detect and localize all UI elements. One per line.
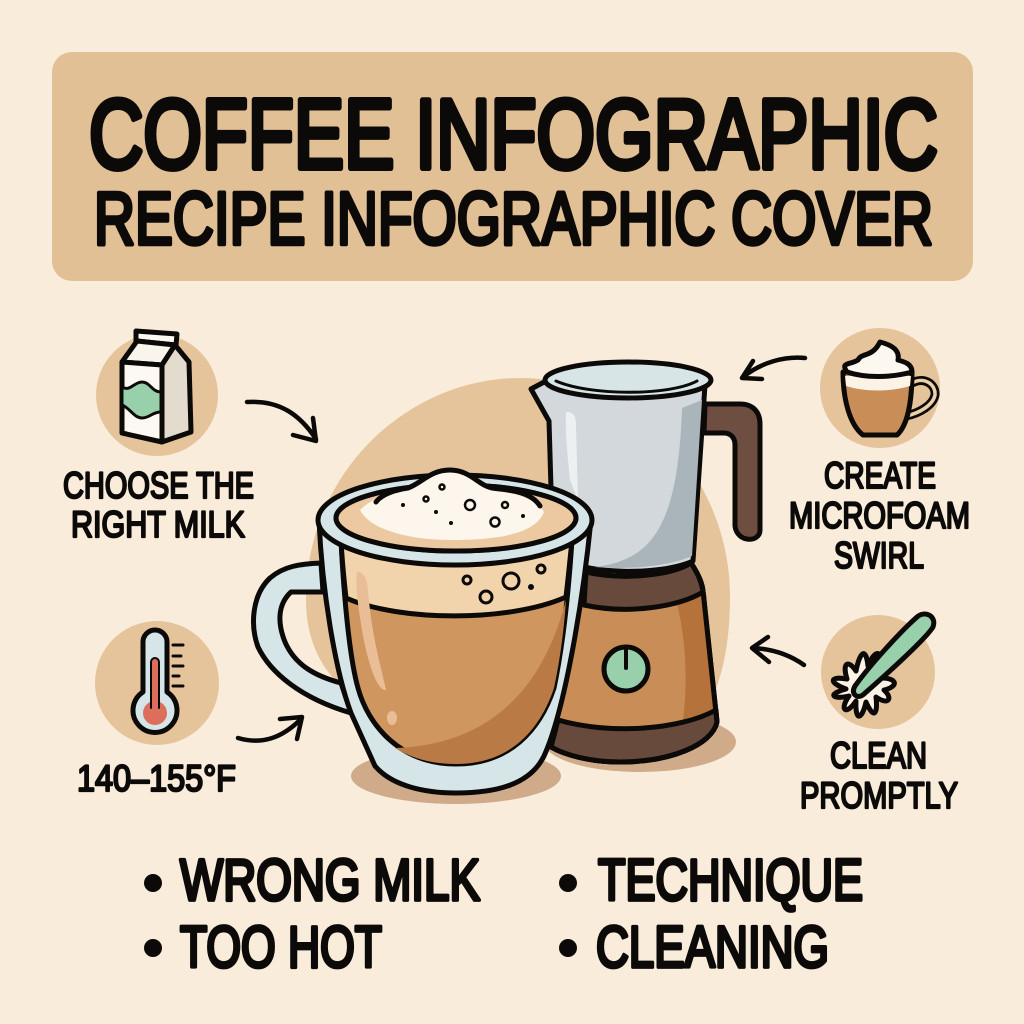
foam layer (341, 540, 572, 616)
bullet: wrong milk: WRONG MILK (180, 848, 480, 913)
label: create microfoam swirl: SWIRL (834, 534, 924, 576)
label: create microfoam swirl: MICROFOAM (789, 494, 970, 536)
highlights (356, 572, 386, 690)
carton label (122, 382, 161, 418)
bullet list (144, 848, 863, 980)
arrow: milk to mug (247, 402, 316, 441)
bullet: cleaning (559, 915, 829, 980)
arrow: microfoam to jug (742, 358, 805, 379)
bubbles (463, 565, 545, 603)
icon: cappuccino cup (820, 328, 940, 448)
label: create microfoam swirl: CREATE (824, 454, 936, 496)
bullet: technique: TECHNIQUE (598, 848, 863, 913)
bullet: too hot (144, 915, 382, 980)
frother base (551, 563, 717, 762)
arrow: clean to base (752, 637, 804, 665)
coffee liquid (341, 540, 572, 764)
mug handle (254, 563, 351, 713)
label: choose the right milk: RIGHT MILK (71, 503, 245, 545)
icon: milk carton (96, 331, 218, 456)
frother handle (704, 404, 760, 539)
label: temperature: 140–155°F (77, 757, 236, 799)
label: clean promptly: CLEAN (830, 734, 927, 776)
label: create microfoam swirl (789, 454, 970, 576)
arrow: temperature to mug (238, 717, 302, 741)
label: clean promptly (800, 734, 958, 816)
title banner (52, 52, 973, 281)
label: choose the right milk: CHOOSE THE (63, 464, 254, 506)
label: clean promptly: PROMPTLY (800, 774, 958, 816)
label: choose the right milk (63, 464, 254, 545)
frother lid (545, 362, 711, 398)
icon: milk frother (531, 362, 760, 772)
mug shadow (351, 748, 561, 804)
milk foam (360, 470, 544, 540)
coffee shade (395, 600, 566, 764)
bullet: cleaning: CLEANING (596, 915, 829, 980)
mug rim (318, 475, 592, 565)
power knob (604, 647, 648, 691)
brush handle (853, 614, 934, 696)
backdrop blob (306, 378, 730, 720)
icon: glass mug of coffee (254, 470, 592, 804)
brush bristles (833, 653, 894, 716)
frother shadow (544, 712, 736, 772)
bullet: technique (559, 848, 863, 913)
mug glass (319, 520, 591, 793)
frother jug (531, 381, 705, 571)
bullet: too hot: TOO HOT (180, 915, 382, 980)
icon: cleaning brush (821, 614, 935, 729)
foam bubbles (401, 484, 525, 526)
icon: thermometer (95, 621, 219, 745)
